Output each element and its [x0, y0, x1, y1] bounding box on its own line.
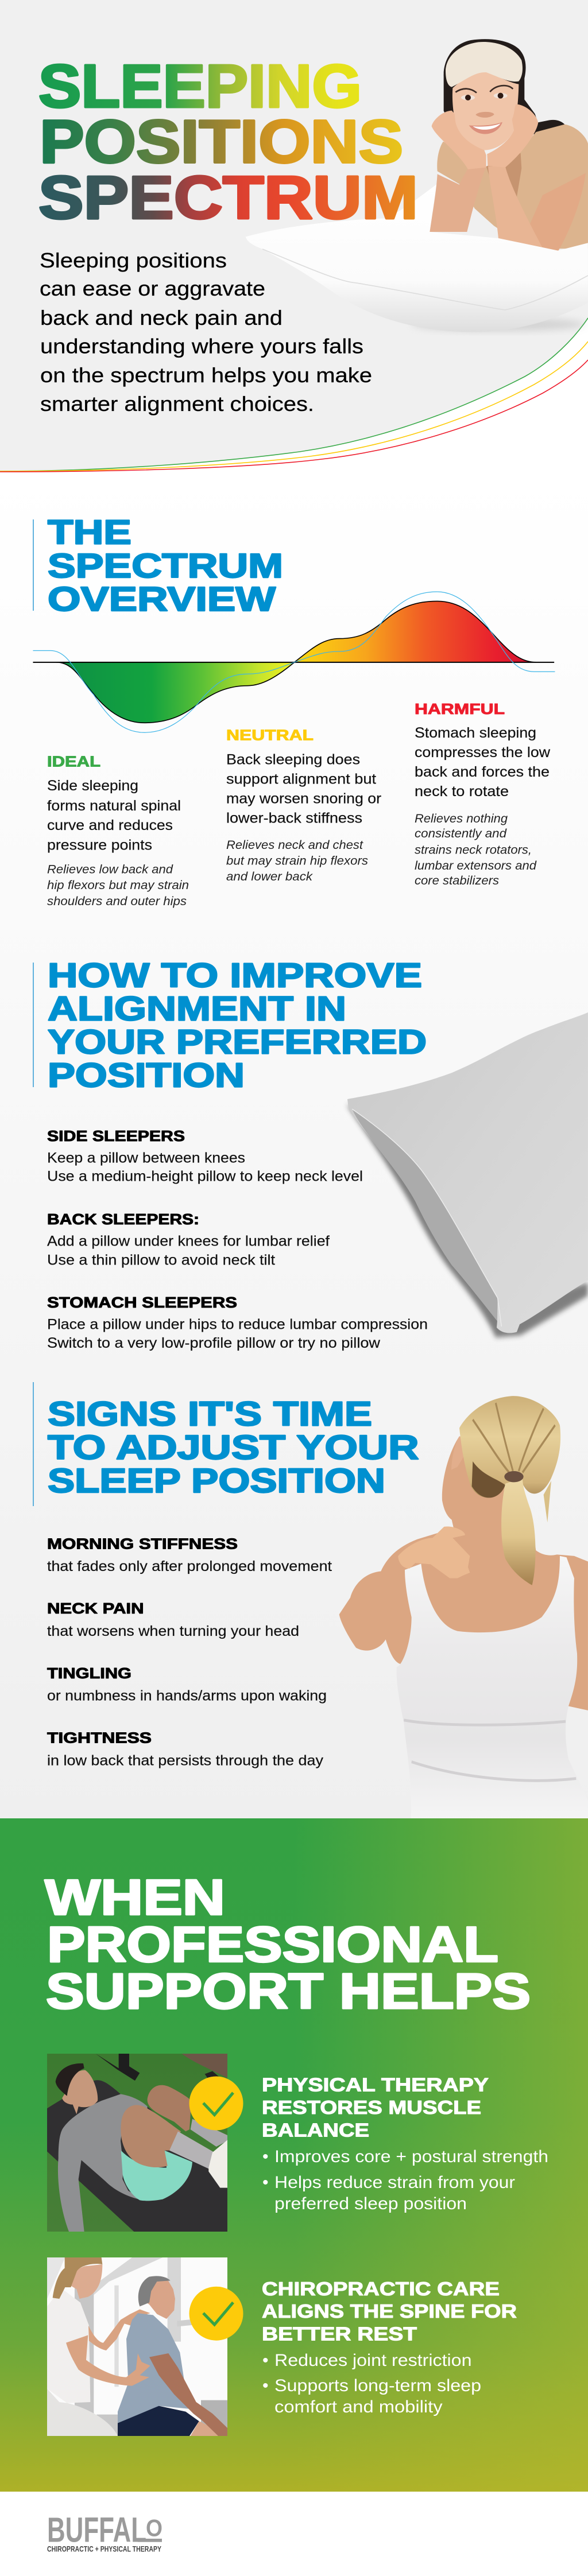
sign: morning stiffness [47, 1535, 332, 1574]
column: ideal: hip flexors but may strain [47, 879, 189, 892]
panel: spectrum overview [33, 513, 555, 908]
column: neutral: support alignment but [226, 771, 376, 787]
pillow shadow [412, 317, 585, 331]
illustration: white pillow [246, 184, 588, 332]
intro text: Sleeping positions [40, 249, 227, 272]
card text: chiropractic care: Supports long-term sleep [274, 2376, 481, 2395]
illustration: grey pillow [346, 1012, 588, 1337]
stray hair [544, 1481, 551, 1523]
pillow side band [352, 1109, 498, 1321]
column: harmful: consistently and [415, 827, 507, 840]
column: ideal: curve and reduces [47, 817, 173, 833]
hero grey background [0, 0, 588, 471]
photo: chiropractor with patient [47, 2257, 227, 2436]
panel: signs it's time to adjust [33, 1382, 588, 1819]
column: harmful: Stomach sleeping [415, 725, 536, 741]
logo: buffalo chiropractic: CHIROPRACTIC + PHYSICAL THERAPY [47, 2544, 161, 2553]
heading: how to improve alignment [48, 956, 427, 1095]
card text: physical therapy: • [262, 2147, 269, 2166]
tips: side sleepers: Use a medium-height pillow to keep neck level [47, 1169, 363, 1185]
icon: check badge 2 [189, 2287, 243, 2341]
column: harmful: back and forces the [415, 764, 550, 780]
sign: neck pain: NECK PAIN [47, 1600, 144, 1617]
heading: when professional support helps: SUPPORT HELPS [46, 1964, 531, 2019]
column: ideal [47, 752, 189, 908]
panel: hero [0, 0, 588, 472]
heading: when professional support helps [45, 1869, 531, 2019]
heading: signs it's time [48, 1395, 419, 1500]
sign: neck pain [47, 1600, 299, 1639]
heading: the spectrum overview [48, 513, 283, 618]
tips: side sleepers: Keep a pillow between knees [47, 1150, 245, 1166]
card text: chiropractic care: Reduces joint restriction [274, 2351, 472, 2370]
tips: stomach sleepers: Place a pillow under hips to reduce lumbar compression [47, 1316, 428, 1332]
face [452, 72, 519, 150]
column: neutral: but may strain hip flexors [226, 854, 369, 868]
column: ideal: forms natural spinal [47, 798, 181, 814]
intro text: on the spectrum helps you make [40, 363, 372, 387]
spectrum curves [0, 318, 588, 472]
heading: when professional support helps: WHEN [45, 1869, 225, 1925]
card text: physical therapy: Helps reduce strain from your [274, 2173, 515, 2192]
heading: signs it's time: TO ADJUST YOUR [48, 1429, 419, 1467]
smile [469, 122, 502, 134]
sign: tingling [47, 1665, 327, 1704]
title: POSITIONS [40, 108, 403, 176]
hand on neck [398, 1527, 470, 1578]
title [38, 52, 418, 231]
hair tie [504, 1471, 524, 1482]
photo: man doing core exercise [47, 2054, 227, 2232]
card text: physical therapy [262, 2074, 548, 2213]
column: ideal: Side sleeping [47, 778, 138, 794]
title: SPECTRUM [38, 164, 418, 231]
heading: how to improve alignment: ALIGNMENT IN [48, 990, 346, 1028]
card text: physical therapy: Improves core + postural strength [274, 2147, 548, 2166]
eyes and brows [455, 86, 513, 100]
pillow body [347, 1012, 588, 1333]
heading: signs it's time: SLEEP POSITION [48, 1462, 385, 1500]
right forearm [488, 166, 544, 250]
tips: stomach sleepers [47, 1294, 428, 1351]
column: ideal: IDEAL [47, 752, 100, 770]
column: neutral [226, 727, 381, 883]
heading: the spectrum overview: THE [48, 513, 131, 551]
hair [444, 39, 564, 136]
tips: side sleepers: SIDE SLEEPERS [47, 1127, 185, 1145]
chest [486, 153, 521, 197]
ear [451, 1436, 466, 1470]
sign: morning stiffness: that fades only after prolonged movement [47, 1558, 332, 1574]
card text: chiropractic care [262, 2278, 517, 2416]
column: neutral: NEUTRAL [226, 727, 314, 744]
card text: chiropractic care: • [262, 2351, 269, 2370]
icon: check badge 1 [189, 2077, 243, 2131]
illustration: woman holding neck [339, 1396, 588, 1819]
column: harmful: HARMFUL [415, 700, 505, 717]
column: neutral: lower-back stiffness [226, 810, 362, 826]
sign: tightness: in low back that persists through the day [47, 1753, 324, 1769]
sleep mask [446, 42, 523, 87]
column: ideal: shoulders and outer hips [47, 895, 187, 908]
column: neutral: Relieves neck and chest [226, 839, 363, 852]
panel: how to improve alignment [33, 956, 588, 1351]
pillow shadow [346, 1105, 588, 1337]
column: harmful: compresses the low [415, 744, 551, 761]
tips: back sleepers: Use a thin pillow to avoid neck tilt [47, 1252, 275, 1268]
card text: chiropractic care: ALIGNS THE SPINE FOR [262, 2300, 517, 2322]
heading: the spectrum overview: OVERVIEW [48, 580, 276, 618]
card text: physical therapy: BALANCE [262, 2119, 369, 2141]
column: ideal: Relieves low back and [47, 863, 173, 876]
left arm [430, 166, 486, 232]
hair under-shadow [472, 1461, 505, 1498]
column: harmful: core stabilizers [415, 874, 500, 887]
tips: stomach sleepers: Switch to a very low-profile pillow or try no pillow [47, 1335, 381, 1351]
card text: chiropractic care: comfort and mobility [274, 2397, 443, 2416]
card text: physical therapy: preferred sleep position [274, 2194, 467, 2213]
panel: when professional support helps [0, 1818, 588, 2492]
heading: how to improve alignment: POSITION [48, 1057, 245, 1095]
tips: back sleepers: BACK SLEEPERS: [47, 1211, 199, 1228]
column: neutral: Back sleeping does [226, 751, 360, 767]
lower page gradient [0, 471, 588, 1820]
title: SLEEPING [38, 52, 362, 120]
hair [459, 1396, 560, 1498]
skin: head side, neck, shoulders and arms [339, 1436, 588, 1710]
heading: how to improve alignment: YOUR PREFERRED [48, 1023, 427, 1061]
tips: stomach sleepers: STOMACH SLEEPERS [47, 1294, 237, 1311]
pillow body [246, 184, 588, 332]
column: harmful: lumbar extensors and [415, 859, 537, 872]
card text: chiropractic care: • [262, 2376, 269, 2395]
hair streaks [473, 1403, 555, 1472]
logo: buffalo chiropractic: BUFFAL [47, 2511, 146, 2550]
hands [432, 111, 486, 169]
column: harmful: Relieves nothing [415, 812, 508, 825]
intro text: back and neck pain and [40, 306, 283, 329]
heading: when professional support helps: PROFESSIONAL [47, 1917, 498, 1973]
tips: back sleepers: Add a pillow under knees for lumbar relief [47, 1233, 330, 1250]
intro text: smarter alignment choices. [40, 392, 314, 416]
right upper arm [529, 173, 586, 251]
column: harmful: neck to rotate [415, 783, 509, 800]
chart: spectrum curve [33, 592, 555, 732]
heading: signs it's time: SIGNS IT'S TIME [48, 1395, 372, 1433]
illustration: woman with sleep mask [430, 39, 588, 251]
card text: chiropractic care: BETTER REST [262, 2323, 417, 2344]
column: neutral: may worsen snoring or [226, 791, 381, 807]
sign: tingling: or numbness in hands/arms upon waking [47, 1687, 327, 1704]
card text: chiropractic care: CHIROPRACTIC CARE [262, 2278, 500, 2299]
pillow seam [352, 1109, 501, 1326]
heading: how to improve alignment: HOW TO IMPROVE [48, 956, 422, 994]
tank top [397, 1556, 588, 1819]
sign: tightness: TIGHTNESS [47, 1729, 152, 1747]
card text: physical therapy: • [262, 2173, 269, 2192]
intro text: can ease or aggravate [40, 277, 265, 300]
nose [475, 112, 494, 118]
tank wrinkles [404, 1720, 576, 1780]
intro text: understanding where yours falls [40, 334, 363, 358]
sign: neck pain: that worsens when turning your head [47, 1623, 299, 1639]
ponytail [501, 1478, 536, 1585]
sign: morning stiffness: MORNING STIFFNESS [47, 1535, 238, 1552]
column: harmful: strains neck rotators, [415, 844, 532, 857]
column: harmful [415, 700, 551, 887]
sign: tingling: TINGLING [47, 1665, 131, 1682]
card text: physical therapy: PHYSICAL THERAPY [262, 2074, 489, 2095]
column: ideal: pressure points [47, 837, 152, 854]
tips: side sleepers [47, 1127, 363, 1185]
sign: tightness [47, 1729, 324, 1769]
card text: physical therapy: RESTORES MUSCLE [262, 2097, 481, 2118]
intro text [40, 249, 372, 416]
heading: the spectrum overview: SPECTRUM [48, 547, 283, 585]
pillow flap seam [262, 249, 588, 310]
tips: back sleepers [47, 1211, 330, 1268]
shirt [437, 125, 588, 249]
logo: buffalo chiropractic: O [146, 2514, 163, 2542]
column: neutral: and lower back [226, 870, 314, 883]
